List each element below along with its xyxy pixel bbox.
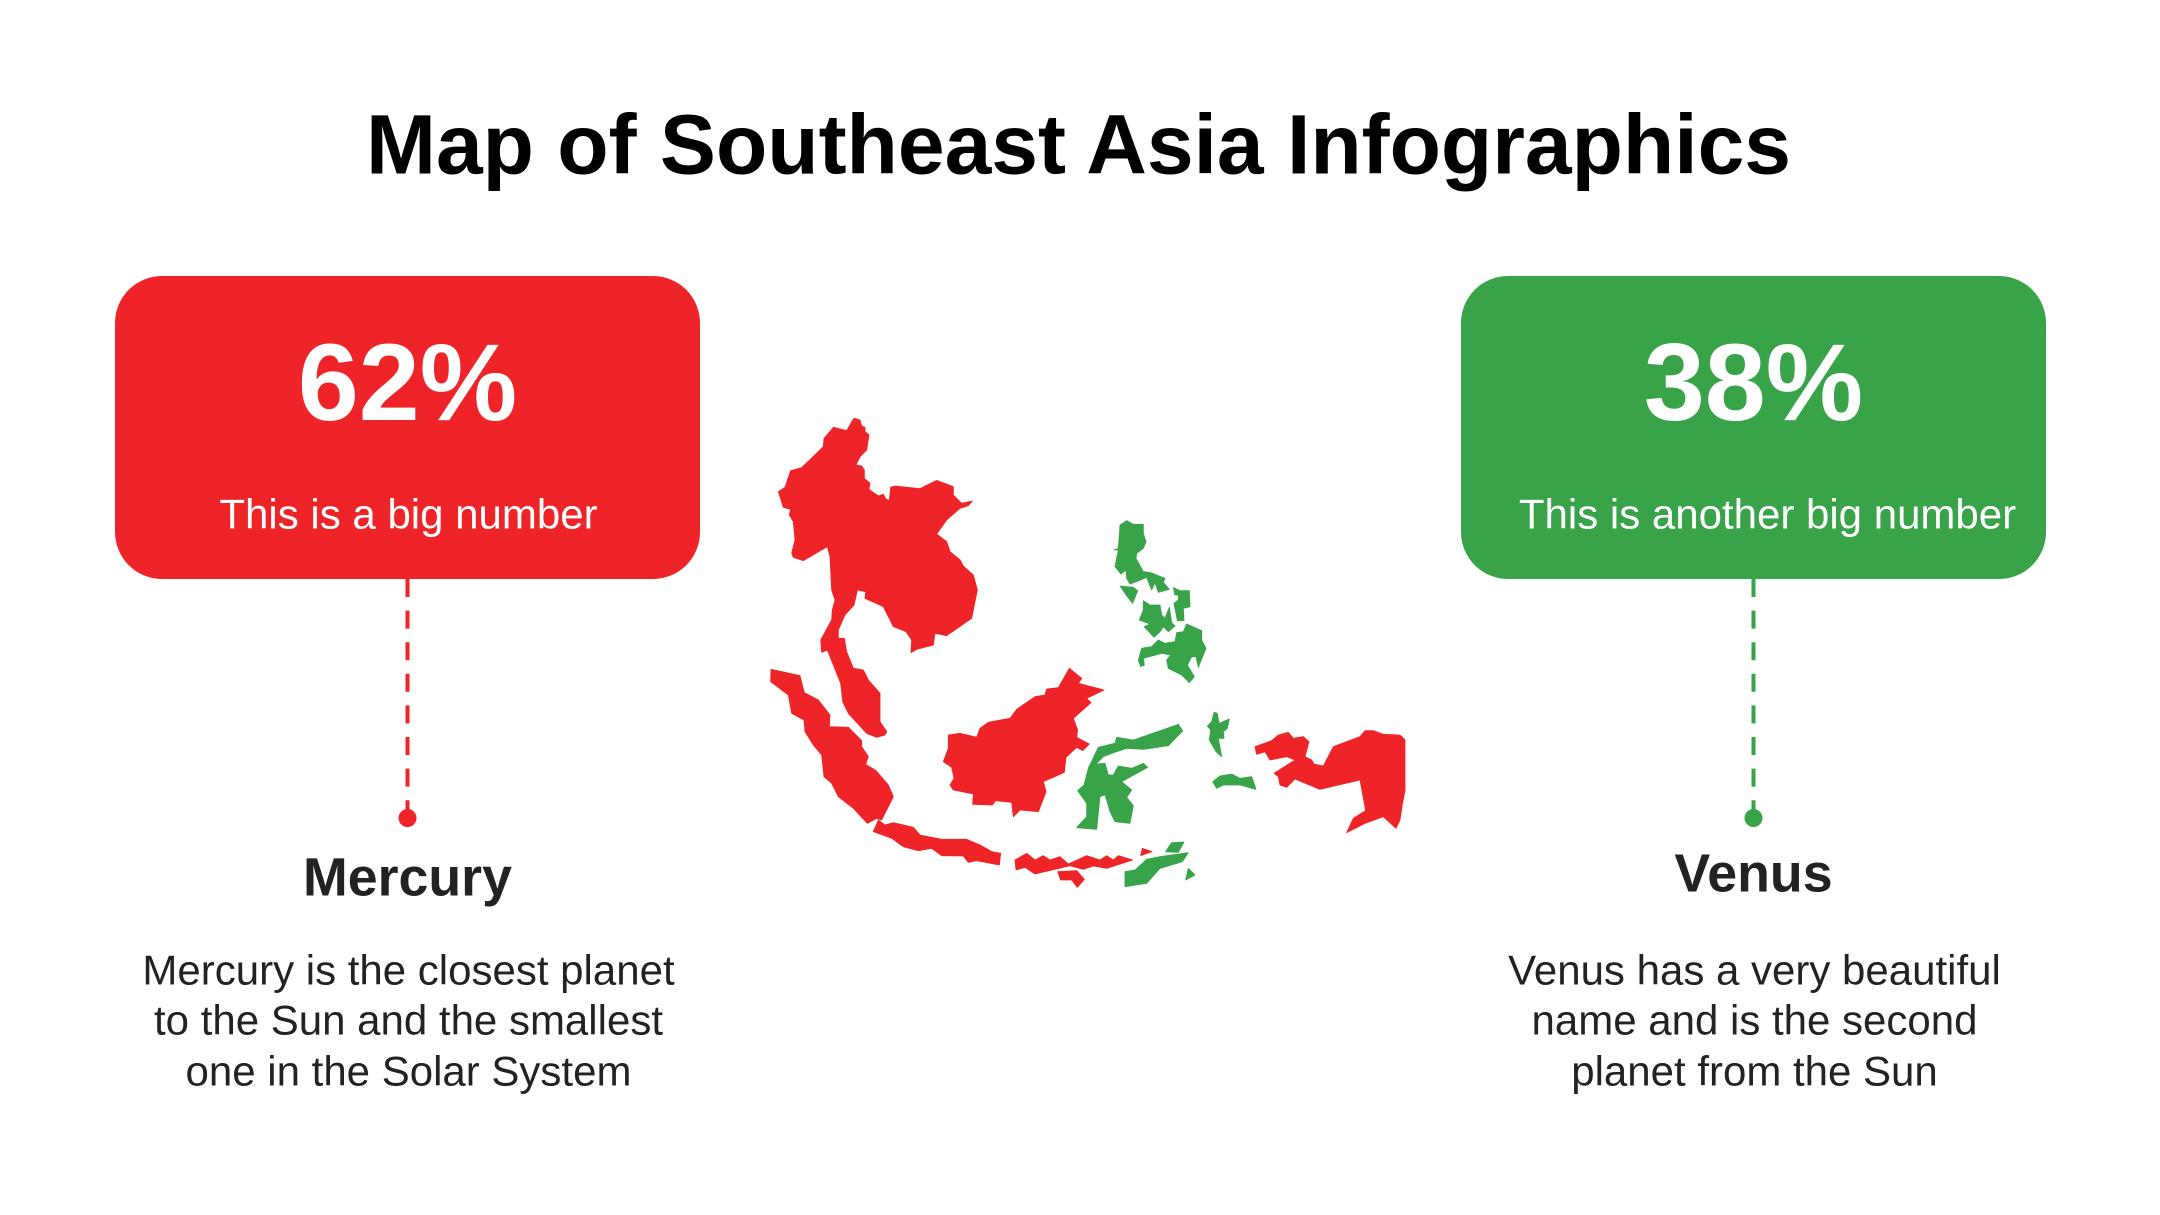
text: Venus description: name and is the second <box>1532 996 1977 1044</box>
text: Venus description: Venus has a very beautiful <box>1508 946 2001 994</box>
stat box: 38%: 38% <box>1644 322 1863 444</box>
map: mainland Southeast Asia <box>778 418 977 737</box>
map: Philippines <box>1114 521 1206 683</box>
text: Venus description: planet from the Sun <box>1571 1048 1938 1094</box>
map: Sumatra <box>771 669 893 823</box>
stat box: 62% <box>115 276 700 579</box>
map: Lesser Sunda islands, green <box>1125 842 1195 887</box>
panel: Mercury <box>115 276 700 1094</box>
map: Sulawesi <box>1077 724 1183 829</box>
stat box: 62%: This is a big number <box>219 490 598 538</box>
text: Mercury description: one in the Solar System <box>186 1048 631 1094</box>
text: Mercury description: to the Sun and the smallest <box>154 996 663 1044</box>
map: Borneo <box>943 668 1104 817</box>
map of Southeast Asia <box>771 418 1405 887</box>
stat box: 62%: 62% <box>298 322 517 444</box>
map: Papua <box>1255 731 1405 833</box>
stat box: 38% <box>1461 276 2046 579</box>
title: Map of Southeast Asia Infographics <box>366 98 1791 192</box>
connector: Venus <box>1744 579 1762 827</box>
text: Mercury description: Mercury is the closest planet <box>142 946 675 994</box>
map: Maluku islands <box>1207 712 1256 789</box>
panel: Venus <box>1461 276 2046 1094</box>
map: Lesser Sunda islands, red <box>1015 848 1152 887</box>
connector: Mercury <box>398 579 416 827</box>
heading: Mercury: Mercury <box>303 848 512 908</box>
heading: Venus: Venus <box>1674 844 1833 904</box>
stat box: 38%: This is another big number <box>1519 490 2016 538</box>
map: Java <box>873 820 1001 865</box>
